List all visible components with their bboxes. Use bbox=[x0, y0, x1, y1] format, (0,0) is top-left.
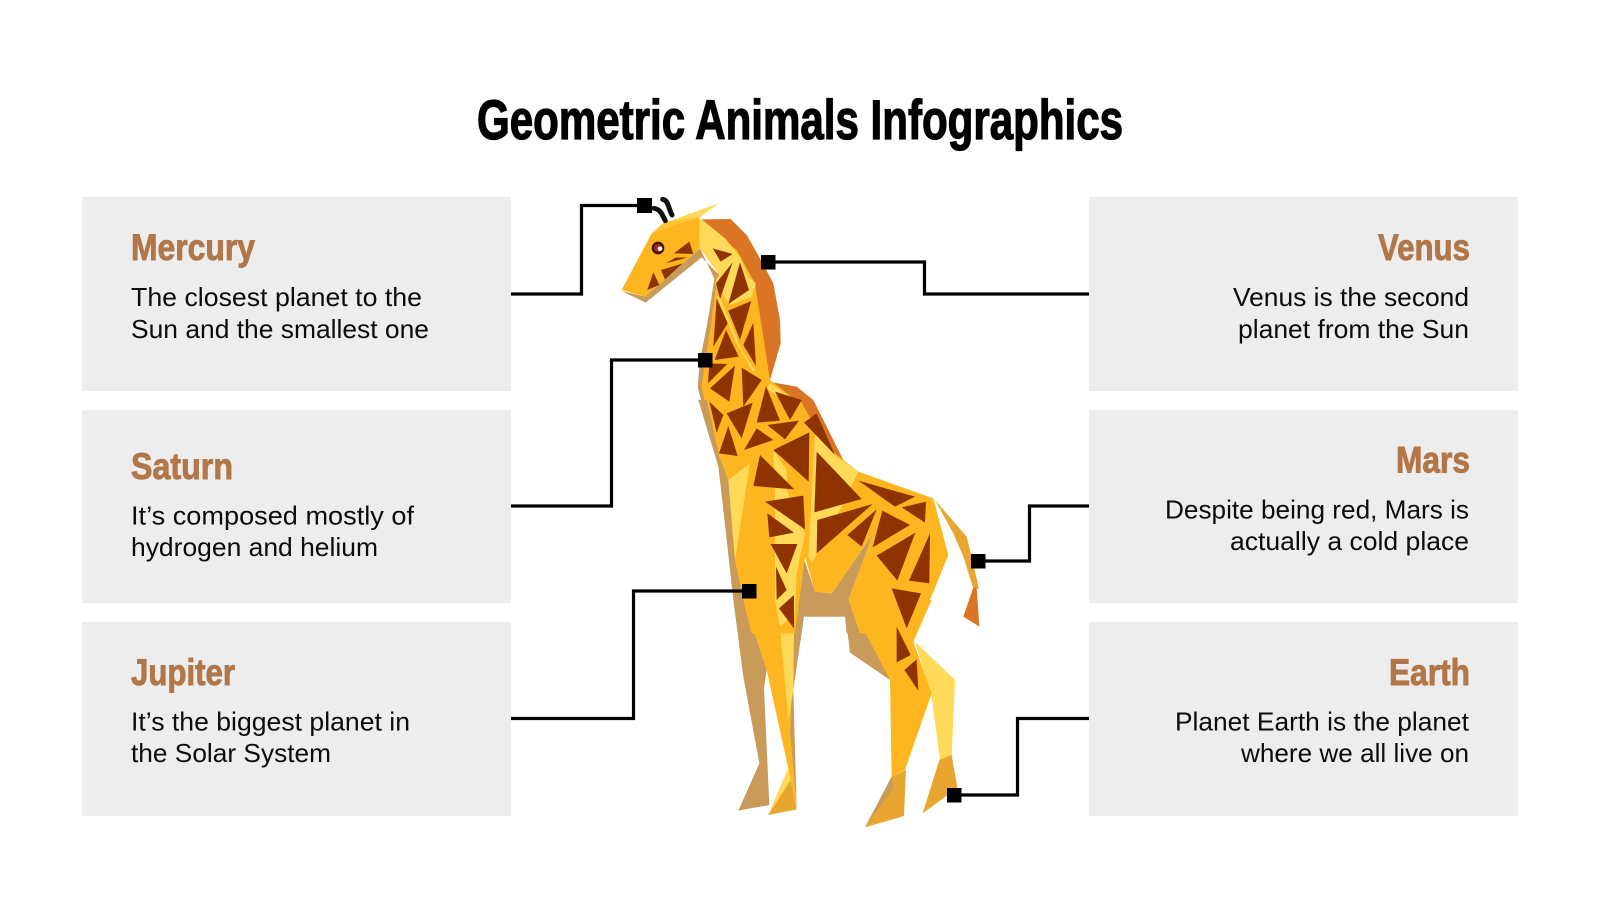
title: Geometric Animals Infographics bbox=[477, 88, 1123, 151]
marker: Saturn bbox=[698, 353, 712, 368]
heading: Mercury: Mercury bbox=[131, 227, 255, 268]
giraffe body base bbox=[698, 400, 979, 633]
connector: Venus bbox=[761, 255, 1089, 294]
panel: Jupiter bbox=[82, 622, 511, 816]
text: Mars description bbox=[1165, 494, 1469, 556]
heading: Mars: Mars bbox=[1396, 440, 1470, 480]
connector: Saturn bbox=[511, 353, 712, 506]
text: Venus description bbox=[1233, 282, 1469, 344]
heading: Earth: Earth bbox=[1389, 652, 1470, 693]
heading: Saturn: Saturn bbox=[131, 446, 233, 487]
text: Mercury description bbox=[131, 282, 429, 344]
text: Jupiter description bbox=[131, 706, 410, 768]
panel: Earth bbox=[1089, 622, 1518, 816]
text: Saturn description: hydrogen and helium bbox=[131, 532, 378, 562]
text: Jupiter description: the Solar System bbox=[131, 738, 331, 768]
heading: Venus: Venus bbox=[1378, 227, 1470, 268]
giraffe head and neck spots bbox=[647, 242, 802, 423]
connector: Mercury bbox=[511, 198, 652, 294]
giraffe horns bbox=[654, 199, 672, 221]
panel: Saturn bbox=[82, 410, 511, 603]
connector: Mars bbox=[971, 506, 1089, 568]
giraffe lower legs bbox=[733, 600, 957, 827]
illustration: geometric giraffe bbox=[622, 199, 979, 827]
text: Jupiter description: It’s the biggest planet in bbox=[131, 706, 410, 736]
connector: Jupiter bbox=[511, 584, 756, 718]
text: Earth description bbox=[1175, 706, 1470, 768]
text: Saturn description bbox=[131, 500, 415, 562]
text: Earth description: Planet Earth is the planet bbox=[1175, 706, 1470, 736]
text: Mars description: actually a cold place bbox=[1230, 526, 1469, 556]
giraffe eye bbox=[652, 242, 664, 254]
giraffe neck and shoulder base bbox=[698, 219, 843, 460]
text: Mercury description: Sun and the smallest one bbox=[131, 314, 429, 344]
text: Mercury description: The closest planet to the bbox=[131, 282, 422, 312]
giraffe hind leg spots bbox=[897, 627, 918, 691]
marker: Earth bbox=[947, 788, 962, 802]
giraffe head bbox=[622, 199, 802, 423]
panel: Venus bbox=[1089, 197, 1518, 391]
heading: Jupiter: Jupiter bbox=[131, 652, 235, 693]
text: Venus description: Venus is the second bbox=[1233, 282, 1469, 312]
marker: Mars bbox=[971, 554, 986, 568]
panel: Mercury bbox=[82, 197, 511, 391]
text: Saturn description: It’s composed mostly of bbox=[131, 500, 415, 530]
marker: Venus bbox=[761, 255, 776, 270]
panel: Mars bbox=[1089, 410, 1518, 603]
text: Earth description: where we all live on bbox=[1240, 738, 1469, 768]
text: Mars description: Despite being red, Mars is bbox=[1165, 494, 1469, 524]
giraffe body spots bbox=[709, 402, 930, 628]
text: Venus description: planet from the Sun bbox=[1238, 314, 1469, 344]
marker: Jupiter bbox=[742, 584, 756, 598]
marker: Mercury bbox=[637, 198, 652, 213]
connector: Earth bbox=[947, 718, 1089, 802]
